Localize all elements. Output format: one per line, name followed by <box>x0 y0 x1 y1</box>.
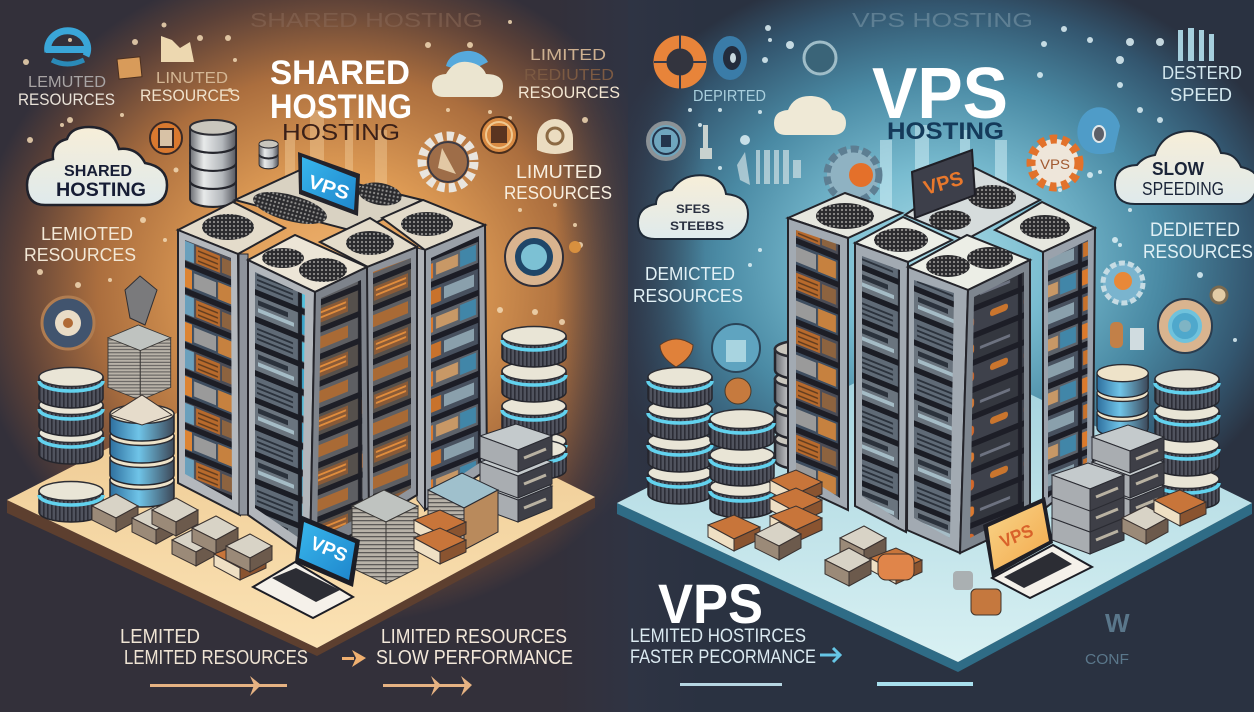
callout: cloud shared hosting <box>27 127 167 205</box>
icon: orange ring <box>654 35 706 89</box>
server tower C right <box>907 235 1030 553</box>
faint label: conf: W <box>1105 608 1130 638</box>
bottom label: lemited hostirces: LEMITED HOSTIRCES <box>630 626 806 647</box>
platform: shared hosting <box>7 350 595 656</box>
laptop: VPS blue: VPS <box>307 533 350 567</box>
server boxes: VPS middle stack <box>1052 463 1124 554</box>
icon: gauge left <box>42 297 94 349</box>
rear tower with VPS monitor <box>235 170 422 232</box>
server boxes: VPS right stack <box>1092 425 1164 522</box>
icon: orange gear: VPS <box>1040 156 1070 172</box>
small book stack <box>414 510 466 564</box>
icon: speed bars <box>1178 28 1214 61</box>
left stacked papers <box>108 276 171 400</box>
ghost heading: VPS hosting: VPS HOSTING <box>852 10 1033 32</box>
icon: key-like slider <box>700 125 712 159</box>
label: demicted resources: RESOURCES <box>633 286 743 306</box>
heading: shared hosting <box>270 54 412 126</box>
icon: orange pendant left <box>660 339 693 367</box>
label: limited rediuted resources: REDIUTED <box>524 67 614 84</box>
small parts on VPS platform <box>840 523 1001 615</box>
faint label: conf: CONF <box>1085 651 1129 668</box>
icon: small brown part <box>725 378 751 404</box>
arrow: bottom VPS left <box>680 683 782 686</box>
subheading: hosting VPS: HOSTING <box>887 118 1004 145</box>
ghost heading: shared hosting: SHARED HOSTING <box>250 10 483 32</box>
paper stack <box>352 490 418 584</box>
icon: top cloud <box>432 51 503 97</box>
label: desterd speed: SPEED <box>1170 85 1232 105</box>
server tower A right <box>788 193 902 510</box>
heading: shared hosting: HOSTING <box>270 88 412 126</box>
icon: small badge <box>569 241 581 253</box>
icon: orange badge left <box>150 122 182 154</box>
callout: cloud shared hosting: HOSTING <box>56 180 146 201</box>
laptop: VPS orange <box>983 497 1092 598</box>
light rays behind left towers <box>285 110 387 210</box>
icon: small badge right <box>1211 287 1227 303</box>
platform: VPS hosting <box>617 345 1252 672</box>
monitor: VPS blue: VPS <box>305 172 352 205</box>
label: limuted resources <box>140 70 240 105</box>
server tower D <box>382 200 487 510</box>
database stack: far left <box>39 368 103 522</box>
arrow: bottom left <box>150 676 287 696</box>
label: limuted resources right: LIMUTED <box>516 162 602 182</box>
label: dedieted resources: DEDIETED <box>1150 220 1240 241</box>
callout: cloud sfies steebs: STEEBS <box>670 219 724 233</box>
heading: VPS: VPS <box>872 54 1008 134</box>
label: lemited resources top left: RESOURCES <box>18 90 115 109</box>
monitor: VPS orange: VPS <box>921 168 966 200</box>
icon: small dark badge <box>804 42 836 74</box>
small hardware: left front <box>92 494 272 580</box>
label: depirted: DEPIRTED <box>693 88 766 105</box>
database stack: front left <box>110 395 174 507</box>
label: demicted resources: DEMICTED <box>645 264 735 284</box>
arrow: faster performance <box>820 648 840 662</box>
icon: small parts right <box>1110 322 1144 350</box>
label: lemited resources middle: RESOURCES <box>24 245 136 265</box>
label: limited rediuted resources: RESOURCES <box>518 83 620 102</box>
bottom label: lemited: LEMITED <box>120 626 200 648</box>
label: limuted resources: LINUTED <box>156 70 228 87</box>
shared hosting server tower group <box>178 152 487 558</box>
label: lemited resources top left: LEMUTED <box>28 74 106 91</box>
label: desterd speed: DESTERD <box>1162 63 1242 83</box>
small hardware: VPS front left <box>708 515 922 586</box>
icon: barcode list <box>737 150 801 185</box>
arrow: to slow performance <box>342 650 366 667</box>
faint label: conf <box>1085 608 1130 668</box>
icon: gauge right <box>505 228 563 286</box>
scattered particles left <box>23 20 588 325</box>
label: limited rediuted resources <box>518 47 620 102</box>
bottom heading: VPS: VPS <box>658 572 763 635</box>
panel: VPS hosting background <box>628 0 1254 712</box>
icon: database small <box>259 140 278 169</box>
rear tower with VPS monitor <box>905 168 1040 240</box>
books: VPS front left <box>770 470 822 542</box>
bottom label: limited resources: LIMITED RESOURCES <box>381 626 567 648</box>
icon: orange badge <box>481 117 517 153</box>
icon: blue gear right <box>1103 263 1143 303</box>
label: limited rediuted resources: LIMITED <box>530 47 606 64</box>
label: demicted resources <box>633 264 743 306</box>
database stack: VPS small blue <box>1097 365 1148 437</box>
bottom label: faster pecormance: FASTER PECORMANCE <box>630 647 816 668</box>
stacked gray hardware behind VPS towers <box>775 340 839 470</box>
database stack: VPS front <box>710 410 774 518</box>
icon: blue circle left <box>712 324 760 372</box>
icon: gear <box>422 136 474 188</box>
server tower B <box>248 235 369 558</box>
icon: chart note <box>117 57 142 79</box>
label: limuted resources right <box>504 162 612 203</box>
database stack behind boxes <box>502 440 566 480</box>
small box and book right <box>1122 490 1206 544</box>
scattered particles right <box>688 25 1237 342</box>
icon: blue badge <box>713 36 747 80</box>
icon: orange gear <box>1031 139 1079 187</box>
server tower D right <box>995 202 1095 510</box>
VPS server tower group <box>788 150 1095 553</box>
panel: shared hosting background <box>0 0 628 712</box>
arrow: bottom VPS right <box>877 682 973 686</box>
monitor: VPS blue <box>298 152 360 216</box>
icon: cream badge <box>537 119 573 154</box>
server tower A <box>178 202 285 515</box>
label: limuted resources: RESOURCES <box>140 86 240 105</box>
icon: circle badge left <box>648 123 684 159</box>
callout: cloud slow speeding: SLOW <box>1152 159 1204 179</box>
bottom label: slow performance: SLOW PERFORMANCE <box>376 647 573 669</box>
icon: cloud plain <box>774 96 846 135</box>
label: lemited resources top left <box>18 74 115 109</box>
server tower B right <box>855 217 952 532</box>
monitor: VPS orange <box>912 150 975 218</box>
subheading: hosting: HOSTING <box>282 119 400 145</box>
icon: blue gear with orange <box>827 149 879 201</box>
icon: folder <box>161 36 194 62</box>
icon: blue globe <box>46 31 88 64</box>
laptop: VPS orange: VPS <box>997 520 1036 552</box>
arrow: bottom middle <box>383 676 472 696</box>
server boxes: right front <box>480 424 552 522</box>
panel: shared hosting glow <box>0 0 628 712</box>
label: dedieted resources <box>1143 220 1253 263</box>
database stack: VPS right <box>1155 370 1219 510</box>
label: lemited resources middle <box>24 224 136 265</box>
bottom label: lemited resources: LEMITED RESOURCES <box>124 647 308 669</box>
light rays behind right towers <box>880 125 1007 210</box>
label: lemited resources middle: LEMIOTED <box>41 224 133 244</box>
label: desterd speed <box>1162 63 1242 105</box>
icon: gauge right middle <box>1158 299 1212 353</box>
callout: cloud sfies steebs: SFES <box>676 202 710 216</box>
database stack: VPS far left <box>648 368 712 504</box>
server tower C <box>320 218 417 525</box>
heading: shared hosting: SHARED <box>270 54 410 92</box>
callout: cloud sfies steebs <box>638 175 748 239</box>
icon: tall database <box>190 120 236 207</box>
blue-topped crate <box>428 473 498 550</box>
laptop: VPS blue <box>253 515 360 618</box>
icon: ring badge right top <box>1077 107 1120 154</box>
callout: cloud slow speeding <box>1115 131 1254 204</box>
label: limuted resources right: RESOURCES <box>504 183 612 203</box>
callout: cloud slow speeding: SPEEDING <box>1142 179 1224 199</box>
callout: cloud shared hosting: SHARED <box>64 163 132 180</box>
database stack: right <box>502 326 566 472</box>
